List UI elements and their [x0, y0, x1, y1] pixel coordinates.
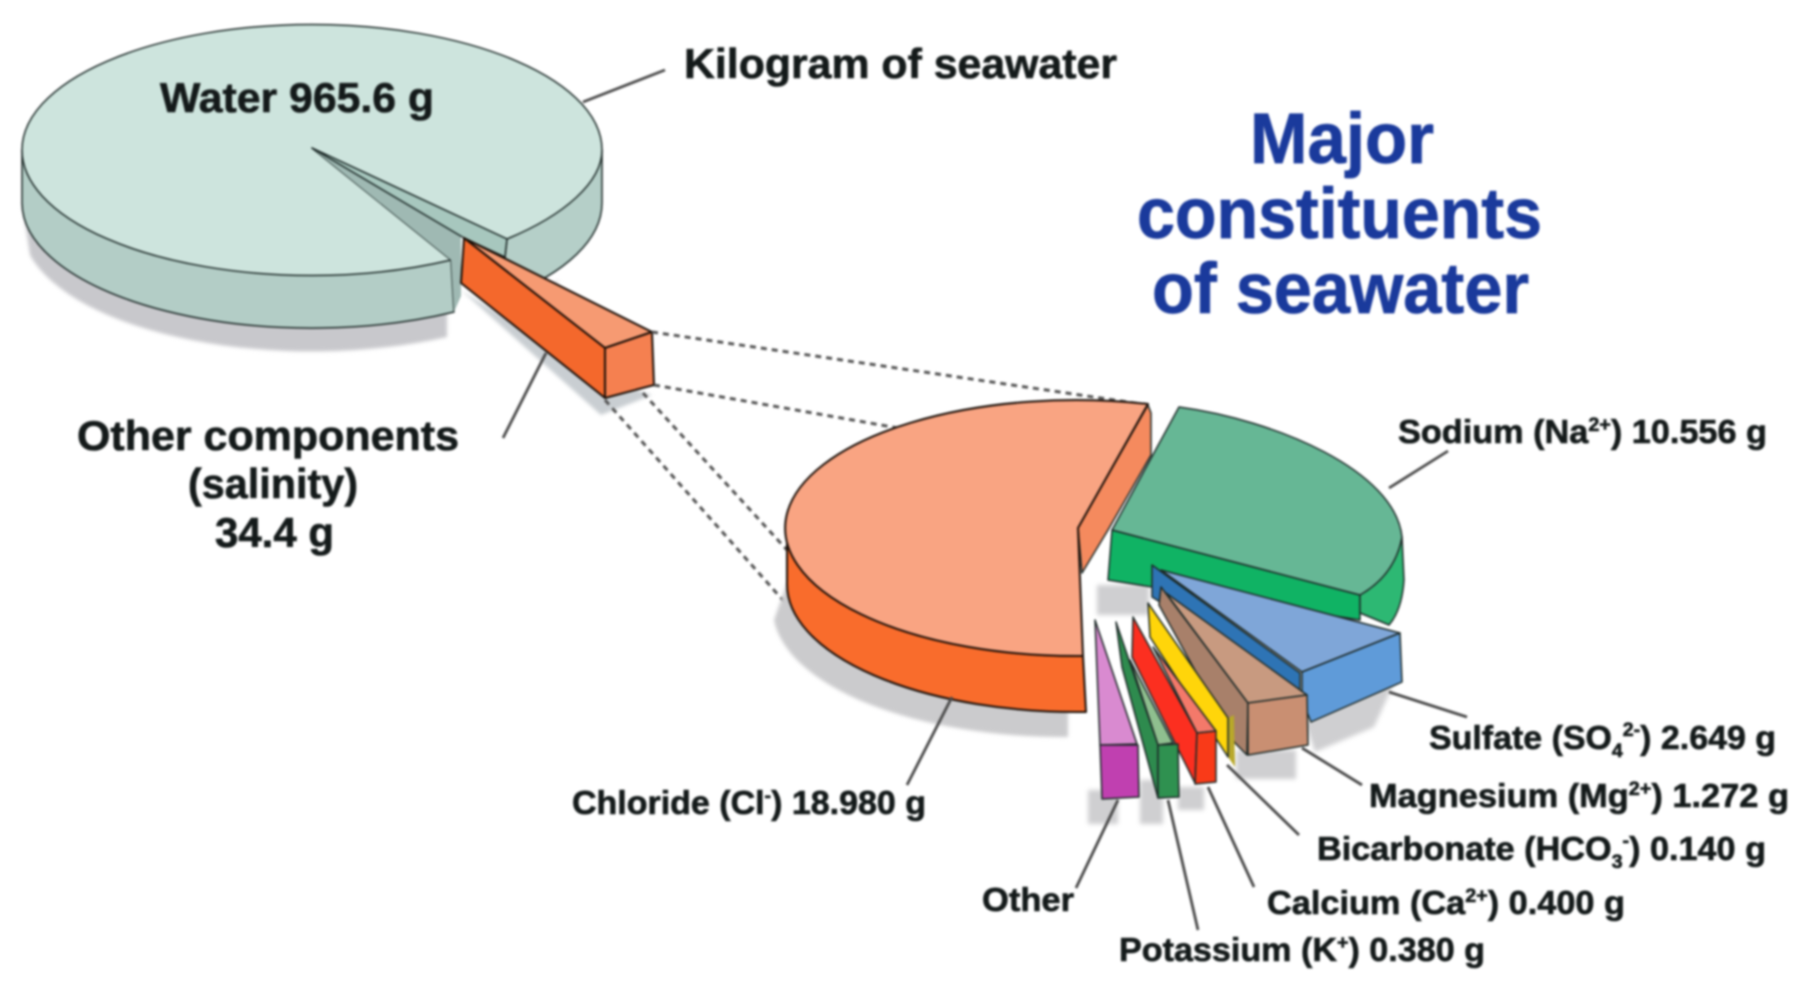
label: other components: [77, 412, 459, 556]
label: potassium: +: [1337, 933, 1348, 954]
label: potassium: Potassium (K: [1119, 931, 1330, 968]
sodium inner face: [1108, 530, 1360, 620]
label: water: Water 965.6 g: [160, 74, 434, 121]
slice shadows: [1088, 585, 1394, 824]
salinity bar top: [464, 238, 652, 348]
label: magnesium: Magnesium (Mg: [1369, 777, 1618, 814]
bicarbonate slice: [1148, 603, 1235, 767]
label: chloride: ) 18.980 g: [771, 784, 926, 821]
pie water top: [22, 24, 602, 276]
label: other components: 34.4 g: [215, 509, 334, 556]
label: magnesium: 2+: [1629, 779, 1651, 800]
pie shadow: [22, 203, 447, 351]
label: sodium: ) 10.556 g: [1611, 413, 1767, 450]
label: sodium: 2+: [1588, 415, 1611, 436]
pie rim right shadow: [505, 280, 560, 315]
label: bicarbonate: 3: [1612, 852, 1623, 873]
label: other: Other: [982, 881, 1074, 918]
chloride rim: [787, 528, 1086, 712]
cut interior right: [312, 148, 507, 257]
cut interior left: [312, 148, 461, 312]
calcium slice: [1132, 617, 1216, 784]
connecting dashed lines: [605, 332, 1148, 607]
chart: kilogram of seawater pie: [22, 24, 654, 415]
label: bicarbonate: -: [1623, 831, 1629, 852]
pie rim left: [22, 150, 454, 328]
magnesium slice: [1159, 587, 1308, 755]
label: sulfate: 4: [1612, 741, 1623, 762]
label: sulfate: ) 2.649 g: [1640, 719, 1776, 756]
label: other components: Other components: [77, 412, 459, 459]
label: calcium: 2+: [1465, 886, 1488, 907]
label: kilogram of seawater: Kilogram of seawater: [684, 40, 1117, 87]
label: sodium: Sodium (Na: [1398, 413, 1581, 450]
label: chloride: Chloride (Cl: [572, 784, 759, 821]
label: bicarbonate: Bicarbonate (HCO: [1317, 830, 1601, 867]
wedge shadow: [461, 290, 652, 415]
other slice: [1095, 620, 1139, 799]
title: Major: [1250, 100, 1434, 179]
title: [1137, 100, 1542, 329]
title: of seawater: [1152, 250, 1529, 329]
label: calcium: Calcium (Ca: [1267, 884, 1458, 921]
label: calcium: ) 0.400 g: [1488, 884, 1625, 921]
salinity bar side: [461, 238, 605, 398]
label: sulfate: 2-: [1623, 720, 1640, 741]
pie rim right: [505, 150, 602, 297]
sodium top: [1112, 407, 1402, 595]
potassium slice: [1116, 622, 1179, 798]
label: sulfate: Sulfate (SO: [1429, 719, 1607, 756]
leader lines: [503, 70, 1467, 930]
chart: major constituents exploded pie: [774, 400, 1404, 824]
label: magnesium: ) 1.272 g: [1651, 777, 1789, 814]
chloride top: [785, 400, 1148, 656]
chloride inner cut face: [1078, 405, 1151, 573]
sulfate slice: [1152, 565, 1402, 722]
label: potassium: ) 0.380 g: [1348, 931, 1485, 968]
title: constituents: [1137, 175, 1542, 254]
label: other components: (salinity): [188, 460, 358, 507]
sodium rim: [1360, 537, 1404, 625]
label: chloride: -: [765, 786, 771, 807]
salinity bar end: [605, 332, 654, 398]
label: bicarbonate: ) 0.140 g: [1629, 830, 1766, 867]
chloride shadow: [774, 583, 1068, 737]
